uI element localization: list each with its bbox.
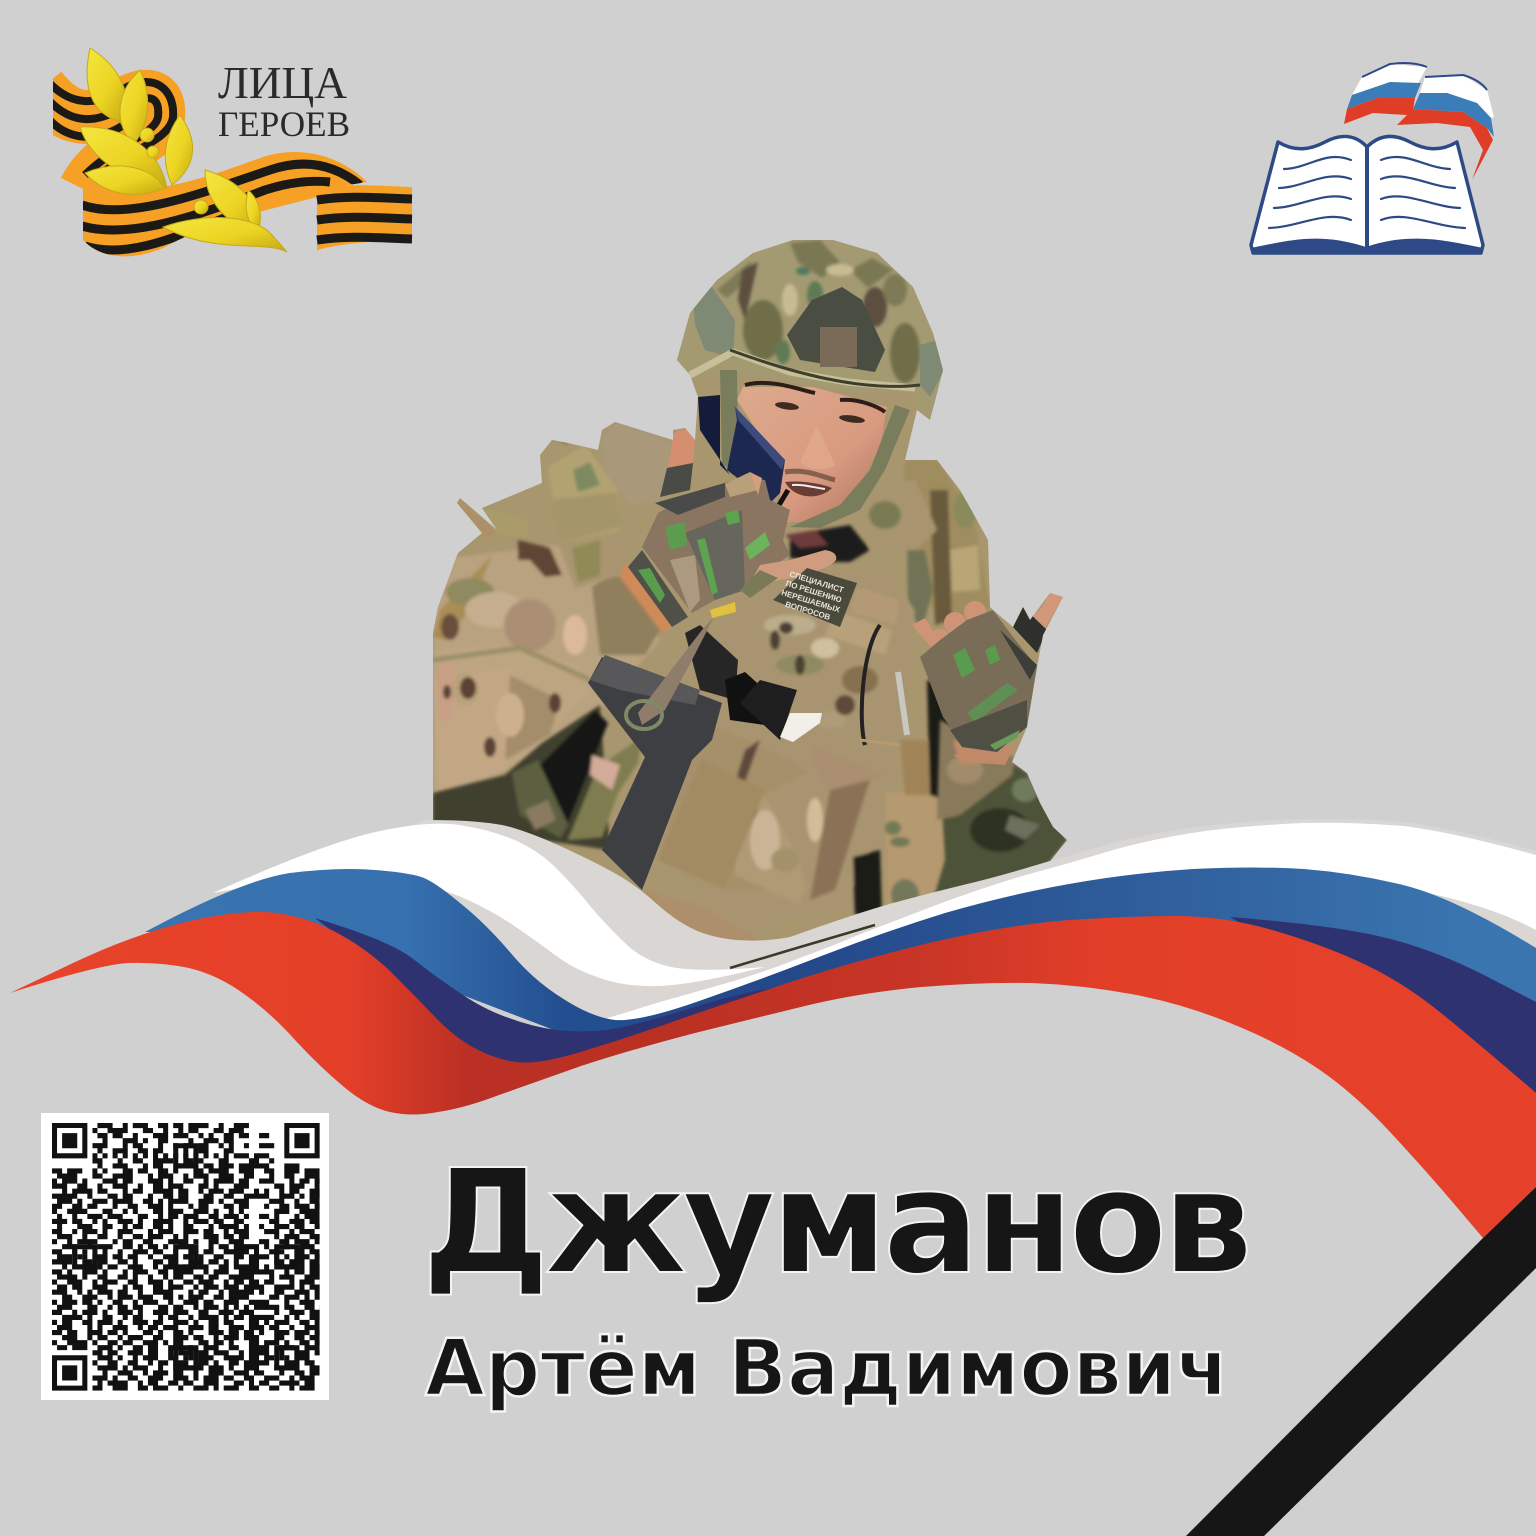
grey fold band bbox=[213, 819, 1536, 1030]
white band, right fold bbox=[598, 823, 1536, 1021]
morale patch: НЕРЕШАЕМЫХ bbox=[780, 588, 842, 615]
left sleeve camouflage bbox=[433, 540, 675, 795]
icon: laurel branch bbox=[80, 48, 287, 252]
first name and patronymic: Артём Вадимович bbox=[425, 1324, 1229, 1414]
dark sliver bbox=[730, 925, 875, 968]
vest pouches bbox=[735, 678, 951, 915]
logo: faces of heroes bbox=[40, 48, 412, 256]
blue band bbox=[145, 868, 1536, 1040]
left hand glove bbox=[628, 430, 836, 627]
icon: St. George ribbon bbox=[40, 72, 412, 256]
phone bbox=[698, 395, 788, 520]
morale patch bbox=[773, 568, 857, 627]
logo: open book and flag bbox=[1251, 63, 1494, 253]
icon: open book bbox=[1251, 137, 1483, 253]
red band bbox=[10, 912, 1536, 1238]
left pouch bbox=[457, 422, 673, 588]
logo text: ГЕРОЕВ bbox=[218, 104, 350, 144]
morale patch: ПО РЕШЕНИЮ bbox=[785, 579, 843, 605]
icon: waving flag bbox=[1344, 63, 1494, 180]
right hand glove bbox=[912, 593, 1063, 765]
helmet bbox=[677, 240, 943, 420]
logo text bbox=[218, 57, 350, 144]
right forearm and olive bag bbox=[933, 718, 1067, 892]
left lower gear bbox=[433, 705, 765, 887]
white band, left fold bbox=[213, 824, 765, 986]
finder squares bbox=[52, 1123, 320, 1391]
face bbox=[737, 383, 887, 522]
mourning ribbon bbox=[1186, 1187, 1536, 1536]
right shoulder and backpack bbox=[785, 460, 990, 640]
morale patch: СПЕЦИАЛИСТ bbox=[788, 570, 845, 595]
helmet straps bbox=[720, 370, 910, 528]
uniform base bbox=[420, 230, 1080, 960]
photo: soldier illustration bbox=[420, 230, 1080, 960]
weapon and magazine bbox=[588, 617, 907, 890]
navy band bbox=[315, 917, 1536, 1110]
surname: Джуманов bbox=[422, 1138, 1248, 1306]
alignment squares bbox=[72, 1143, 299, 1370]
QR code bbox=[41, 1113, 329, 1400]
logo text: ЛИЦА bbox=[218, 57, 347, 108]
morale patch: ВОПРОСОВ bbox=[784, 600, 832, 622]
flag wave bbox=[10, 819, 1536, 1238]
plate carrier bbox=[763, 589, 916, 727]
